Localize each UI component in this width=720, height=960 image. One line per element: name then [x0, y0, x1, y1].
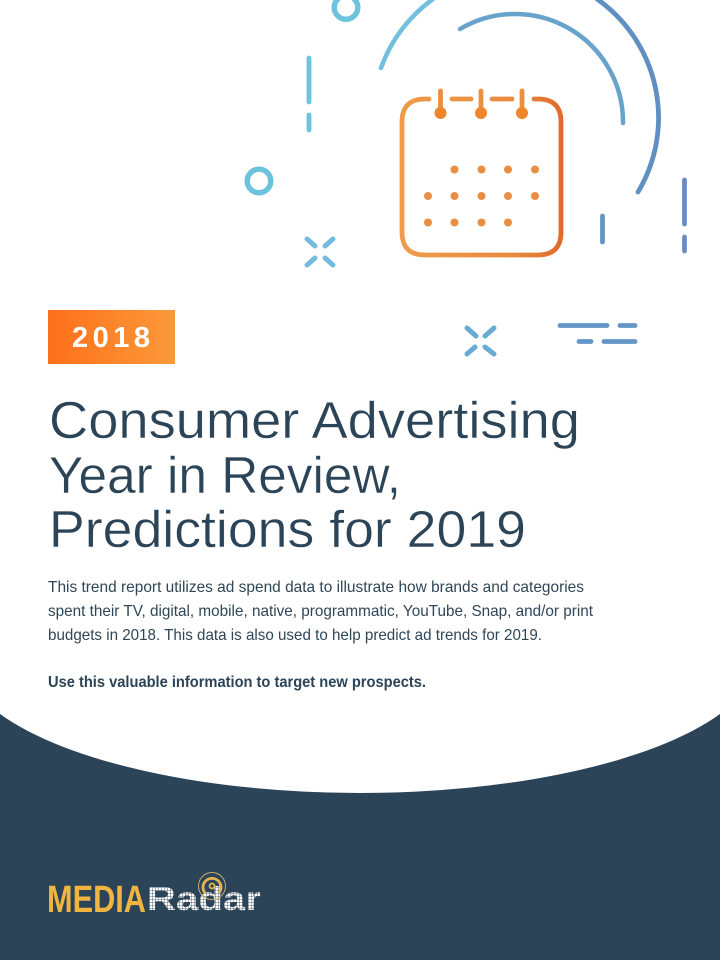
title	[49, 392, 580, 559]
short dash	[600, 216, 605, 242]
intro paragraph: budgets in 2018. This data is also used to help predict ad trends for 2019.	[48, 627, 542, 644]
call to action: Use this valuable information to target new prospects.	[48, 674, 426, 691]
icon: top ring	[334, 0, 358, 19]
title: Predictions for 2019	[49, 501, 526, 559]
inner arc	[460, 14, 623, 123]
logo pixel grid	[146, 884, 263, 911]
title: Consumer Advertising	[49, 392, 580, 450]
decorative illustration	[247, 0, 684, 354]
right dashes	[682, 180, 687, 251]
intro paragraph: spent their TV, digital, mobile, native, programmatic, YouTube, Snap, and/or print	[48, 603, 594, 620]
logo radar word: Radar	[147, 880, 261, 917]
left dashes	[307, 58, 311, 130]
icon: calendar	[402, 91, 561, 255]
icon: left ring	[247, 169, 271, 193]
outer arc left part	[381, 0, 433, 68]
dark footer panel	[0, 714, 720, 960]
year badge: 2018	[72, 322, 150, 354]
year badge	[48, 310, 175, 364]
horizontal dashes	[560, 326, 635, 342]
icon: right cross marks	[467, 328, 494, 354]
title: Year in Review,	[49, 447, 401, 505]
icon: left cross marks	[307, 239, 333, 265]
logo: MediaRadar: MEDIA	[47, 879, 146, 921]
outer arc right part	[597, 0, 659, 192]
logo radar rings	[198, 872, 226, 900]
intro paragraph	[48, 579, 594, 644]
logo: MediaRadar	[47, 872, 263, 921]
intro paragraph: This trend report utilizes ad spend data to illustrate how brands and categories	[48, 579, 584, 596]
